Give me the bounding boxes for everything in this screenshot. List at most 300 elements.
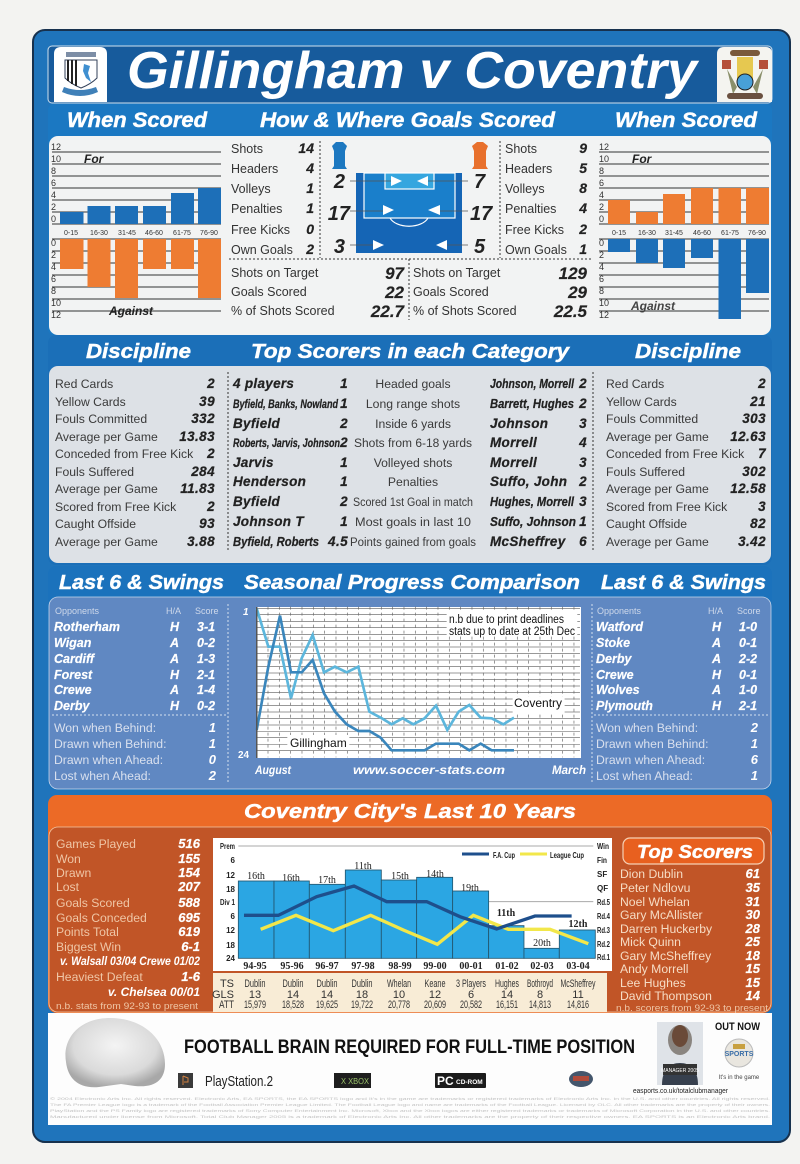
table: top scorers by season: 18,528 [282, 999, 304, 1011]
text block: Coventry top scorers: 2 [578, 376, 587, 391]
text block: Coventry swings [596, 720, 759, 783]
text block: Coventry discipline: Fouls Suffered [606, 465, 685, 479]
text block: Coventry top scorers: 2 [578, 396, 587, 411]
text block: Coventry top scorers: 3 [579, 494, 587, 509]
table: Coventry last 6: H/A [708, 606, 723, 616]
bar chart: Gillingham when scored: 6 [51, 178, 56, 188]
text block: Gillingham discipline [55, 376, 215, 549]
text block: Coventry swings: Won when Behind: [596, 721, 698, 735]
text block: Gillingham swings [54, 720, 217, 783]
bar chart: Gillingham when scored: 2 [51, 202, 56, 212]
text block: Gillingham discipline: Fouls Suffered [55, 465, 134, 479]
axis labels left: 6 [231, 856, 236, 865]
text block: Gillingham top scorers [232, 376, 348, 549]
bar chart: Coventry when scored [599, 142, 769, 320]
text block: Gillingham shot types: Penalties [231, 202, 282, 216]
text block: Coventry totals: 22.5 [553, 302, 588, 321]
text block: all-time scorers: 61 [746, 866, 760, 881]
table: Coventry last 6: 0-1 [739, 636, 757, 650]
text block: Coventry overall record: Goals Conceded [56, 911, 147, 925]
axis labels right: Win [597, 842, 609, 851]
panel: lower orange background [49, 827, 771, 1012]
text block: Coventry overall record: 619 [178, 924, 201, 939]
headline: FOOTBALL BRAIN REQUIRED FOR FULL-TIME POSITION [184, 1037, 635, 1058]
table: Coventry last 6: A [711, 652, 721, 666]
axis labels left: 12 [226, 926, 236, 935]
table: top scorers by season: McSheffrey [560, 978, 596, 990]
text block: Coventry discipline: Yellow Cards [606, 395, 677, 409]
table: Coventry last 6: Plymouth [596, 699, 653, 713]
text block: Coventry discipline: 3.42 [738, 534, 766, 549]
heading: seasonal progress comparison: Seasonal Progress Comparison [244, 572, 580, 594]
table: top scorers by season: 18 [356, 989, 368, 1001]
text block: Gillingham top scorers: Roberts, Jarvis, Johnson [233, 436, 340, 450]
text block: Gillingham shot types: 4 [305, 160, 314, 176]
text block: Coventry discipline: 7 [758, 446, 767, 461]
heading: how and where goals scored: How & Where Goals Scored [260, 109, 556, 132]
table: top scorers by season: ATT [219, 999, 234, 1011]
table: Coventry last 6: 0-1 [739, 668, 757, 682]
text block: Gillingham swings: Drawn when Ahead: [54, 753, 163, 767]
text block: Coventry shot types: Free Kicks [505, 223, 564, 237]
text block: Coventry totals: 129 [559, 264, 588, 283]
bar chart: Coventry when scored: 8 [599, 286, 604, 296]
text block: Gillingham top scorers: Jarvis [233, 455, 274, 470]
season labels: 94-95 [243, 961, 267, 972]
table: Gillingham last 6: A [169, 652, 179, 666]
heading: when scored right: When Scored [615, 109, 758, 132]
season labels [243, 961, 590, 972]
axis labels left: 24 [226, 954, 236, 963]
line chart: seasonal progress [238, 607, 586, 777]
small print: © 2004 Electronic Arts Inc. All rights reserved. Electronic Arts, EA SPORTS, the EA SPORTS logo and It's in the game are trademarks or registered trademarks of Electronic Arts Inc. in the U.S. and other countries. All rights reserved. [50, 1096, 770, 1101]
text block: all-time scorers: 15 [746, 961, 761, 976]
text block: Coventry discipline: Average per Game [606, 535, 709, 549]
text block: Gillingham shot types: 2 [305, 241, 314, 257]
text block: Coventry overall record: 588 [178, 895, 201, 910]
text block: all-time scorers: 25 [745, 934, 761, 949]
table: Coventry last 6: H [712, 699, 722, 713]
logo: Xbox: X XBOX [341, 1077, 370, 1086]
text block: all-time scorers: Gary McSheffrey [620, 949, 712, 963]
panel: statistics [49, 136, 771, 335]
text block: Gillingham discipline: Red Cards [55, 377, 113, 391]
text block: Coventry shot types: 4 [578, 200, 587, 216]
text block: Gillingham top scorers: 1 [340, 376, 348, 391]
callout: top scorers heading [623, 838, 764, 864]
axis labels left: 18 [226, 885, 236, 894]
table: top scorers by season: 20,582 [460, 999, 482, 1011]
bar chart: Coventry when scored: 4 [599, 190, 604, 200]
text block: categories [350, 377, 476, 549]
text block: Coventry overall record: Won [56, 852, 81, 866]
text block: Gillingham swings: Lost when Ahead: [54, 769, 151, 783]
table: Coventry last 6: Derby [596, 652, 632, 666]
bar chart: Gillingham when scored: 12 [51, 310, 61, 320]
text block: Gillingham top scorers: 1 [340, 514, 348, 529]
table: Coventry last 6: Crewe [596, 668, 634, 682]
table: top scorers by season: 6 [468, 989, 474, 1001]
finishing positions: 20th [533, 938, 551, 949]
table: Coventry last 6: 2-2 [738, 652, 757, 666]
goal zone numbers: Coventry: 17 [470, 203, 493, 225]
finishing positions: 11th [354, 861, 372, 872]
legend [462, 850, 584, 860]
text block: Gillingham discipline: Scored from Free Kick [55, 500, 177, 514]
text block: Coventry discipline: Scored from Free Kick [606, 500, 728, 514]
text block: Gillingham shot types: Shots [231, 142, 263, 156]
bar chart: Coventry when scored: 0 [599, 238, 604, 248]
finishing positions: 11th [497, 908, 516, 919]
table: Coventry last 6: Stoke [596, 636, 630, 650]
axis labels right: Rd.1 [597, 953, 610, 962]
table: Coventry last 6: 2-1 [738, 699, 757, 713]
table: Gillingham last 6: 0-2 [197, 636, 215, 650]
axis labels: March [552, 765, 586, 777]
text block: Gillingham swings: Drawn when Behind: [54, 737, 166, 751]
text: it's in the game: It's in the game [719, 1075, 760, 1081]
bar chart: Coventry when scored: 16-30 [638, 230, 656, 237]
table: top scorers by season: 3 Players [456, 978, 486, 990]
table: Gillingham last 6: Forest [54, 668, 93, 682]
text block: categories: Long range shots [366, 397, 460, 411]
text block: Coventry shot types: Headers [505, 162, 552, 176]
text block: Gillingham top scorers: 1 [340, 474, 348, 489]
table: top scorers by season: Hughes [495, 978, 519, 990]
table: Coventry last 6: 1-0 [739, 683, 757, 697]
table: Gillingham last 6: Cardiff [54, 652, 96, 666]
text block: Gillingham top scorers: 2 [339, 435, 348, 450]
season labels: 98-99 [388, 961, 412, 972]
axis labels right: Rd.5 [597, 898, 610, 907]
text block: Coventry top scorers: 3 [579, 416, 587, 431]
season labels: 96-97 [315, 961, 339, 972]
text block: Coventry shot types: Penalties [505, 202, 556, 216]
table: top scorers by season: GLS [212, 989, 234, 1001]
table: Gillingham last 6: H [170, 620, 180, 634]
text block: Coventry overall record: 154 [178, 865, 201, 880]
section: when scored and how goals scored [48, 104, 772, 335]
text block: Coventry discipline: 302 [742, 464, 766, 479]
text block: Coventry overall record: 1-6 [181, 969, 201, 984]
text block: Coventry shot types: 2 [578, 221, 587, 237]
section: discipline and top scorers [48, 335, 772, 565]
text block: Coventry top scorers [490, 376, 587, 549]
bar chart: Gillingham when scored: 4 [51, 190, 56, 200]
season labels: 97-98 [351, 961, 375, 972]
text block: Gillingham discipline: Conceded from Free Kick [55, 447, 194, 461]
season labels: 01-02 [495, 961, 519, 972]
axis labels: August [254, 765, 292, 777]
text block: Coventry discipline: Caught Offside [606, 517, 687, 531]
axis labels: 24 [238, 750, 250, 761]
text block: Gillingham totals: 22 [384, 283, 405, 302]
table: Gillingham last 6: Derby [54, 699, 90, 713]
text block: Coventry overall record: 207 [177, 879, 201, 894]
table: top scorers by season: Keane [424, 978, 446, 990]
small print: Manufactured under license from Microsoft. Total Club Manager 2005 is a trademark of Electronic Arts Inc. All other trademarks are the property of their respective owners. EA SPORTS is an Electronic Arts brand. [50, 1114, 770, 1119]
axis labels left: 18 [226, 941, 236, 950]
text block: all-time scorers: 30 [746, 907, 761, 922]
table: top scorers by season: 11 [572, 989, 584, 1001]
text block: Coventry discipline: Red Cards [606, 377, 664, 391]
text block: Gillingham totals: Goals Scored [231, 285, 307, 299]
small print [50, 1096, 770, 1119]
text block: Gillingham discipline: Average per Game [55, 535, 158, 549]
text block: all-time scorers: Dion Dublin [620, 867, 683, 881]
text block: Gillingham shot types [231, 140, 314, 257]
table: Gillingham last 6: H/A [166, 606, 181, 616]
text block: Gillingham swings: 2 [208, 768, 217, 783]
text block: Gillingham totals: Shots on Target [231, 266, 319, 280]
logo: PC CD-ROM: CD-ROM [456, 1079, 483, 1086]
text block: Gillingham swings: 1 [209, 736, 216, 751]
text block: Coventry discipline: 303 [742, 411, 766, 426]
text block: Coventry top scorers: Johnson, Morrell [490, 377, 574, 391]
text block: Coventry shot types [505, 140, 587, 257]
text block: Coventry overall record: Drawn [56, 866, 91, 880]
bar chart: Coventry when scored: 4 [599, 262, 604, 272]
text block: Gillingham shot types: 14 [298, 140, 314, 156]
table: Gillingham last 6: Opponents [55, 606, 100, 616]
text block: Gillingham shot types: Volleys [231, 182, 271, 196]
label: Gillingham: Gillingham [290, 736, 347, 750]
table: Coventry last 6: Opponents [597, 606, 642, 616]
note: print deadlines [449, 614, 575, 638]
table: top scorers by season: 20,778 [388, 999, 410, 1011]
text block: Coventry discipline: 12.58 [730, 481, 766, 496]
bar chart: Coventry when scored: 31-45 [665, 230, 683, 237]
bar chart: Coventry when scored: 61-75 [721, 230, 739, 237]
text block: Coventry overall record: 6-1 [181, 939, 200, 954]
bar chart: Gillingham when scored: 76-90 [200, 230, 218, 237]
text block: Gillingham totals: 97 [385, 264, 406, 283]
table: top scorers by season: Dublin [244, 978, 266, 990]
text block: Coventry top scorers: McSheffrey [490, 534, 567, 549]
table: top scorers by season: 14,816 [567, 999, 589, 1011]
table: top scorers by season: 10 [393, 989, 405, 1001]
text block: Coventry overall record: 516 [178, 836, 201, 851]
bar chart: Gillingham when scored: For [84, 152, 105, 166]
text block: Coventry top scorers: Suffo, John [490, 474, 567, 489]
small print: PlayStation and the PS Family logo are registered trademarks of Sony Computer Entertainment Inc. Microsoft, Xbox and the Xbox logos are either registered trademarks or trademarks of Microsoft Corporation in the U.S. and other countries. [50, 1108, 770, 1113]
goal zone numbers: Gillingham: 3 [334, 236, 345, 258]
table: Gillingham last 6: 1-4 [197, 683, 215, 697]
text block: Gillingham discipline: 13.83 [179, 429, 215, 444]
text block: all-time scorers: David Thompson [620, 989, 712, 1003]
table: top scorers by season: Dublin [352, 978, 372, 990]
text block: Coventry overall record: Goals Scored [56, 896, 130, 910]
text block: Coventry top scorers: 3 [579, 455, 587, 470]
text block: Coventry swings: 1 [751, 768, 758, 783]
text block: Gillingham totals: 22.7 [370, 302, 406, 321]
text block: Gillingham discipline: Yellow Cards [55, 395, 126, 409]
text block: all-time scorers: Peter Ndlovu [620, 881, 690, 895]
legend: F.A. Cup [493, 850, 515, 860]
text block: Coventry totals [413, 264, 588, 321]
text block: Coventry overall record: Lost [56, 880, 80, 894]
text block: Gillingham discipline: 39 [199, 394, 215, 409]
text block: Gillingham shot types: 1 [306, 200, 314, 216]
text block: Gillingham top scorers: Johnson T [233, 514, 305, 529]
heading: last 6 and swings right: Last 6 & Swings [601, 572, 766, 594]
icon: Coventry crest [717, 47, 772, 102]
text block: Coventry top scorers: Suffo, Johnson [490, 515, 576, 529]
table: top scorers by season: 14,813 [529, 999, 551, 1011]
text block: Gillingham swings: Won when Behind: [54, 721, 156, 735]
bar chart: Gillingham when scored: 12 [51, 142, 61, 152]
bar chart: Coventry when scored: 12 [599, 142, 609, 152]
text block: Gillingham top scorers: 4.5 [327, 534, 348, 549]
text block: Coventry discipline [606, 376, 767, 549]
text block: categories: Headed goals [375, 377, 451, 391]
text block: all-time scorers: 14 [746, 988, 761, 1003]
axis labels left: 12 [226, 871, 236, 880]
text block: Gillingham top scorers: Byfield, Roberts [233, 535, 319, 549]
table: top scorers by season: 14 [501, 989, 513, 1001]
axis labels right: Rd.4 [597, 912, 610, 921]
text block: Coventry top scorers: Morrell [490, 455, 537, 470]
table: Coventry last 6: A [711, 636, 721, 650]
finishing positions: 16th [247, 871, 265, 882]
logo: Xbox [334, 1073, 371, 1088]
bar chart: Coventry when scored: 2 [599, 202, 604, 212]
text block: Coventry discipline: 3 [758, 499, 766, 514]
table: Gillingham last 6: Rotherham [54, 620, 120, 634]
logo: PlayStation 2: PlayStation.2 [205, 1073, 273, 1090]
text: website: easports.co.uk/totalclubmanager [633, 1088, 729, 1095]
text block: Coventry swings: 1 [751, 736, 758, 751]
text block: categories: Penalties [388, 475, 438, 489]
axis labels right [597, 842, 610, 962]
text block: all-time scorers: 31 [746, 894, 760, 909]
bar chart: Coventry when scored: 12 [599, 310, 609, 320]
text block: Gillingham top scorers: 2 [339, 494, 348, 509]
chart: league position and cup runs [213, 838, 612, 972]
bar chart: Coventry when scored: 76-90 [748, 230, 766, 237]
text block: all-time scorers: 28 [745, 921, 761, 936]
bar chart: Coventry when scored: 46-60 [693, 230, 711, 237]
text block: categories: Volleyed shots [374, 456, 452, 470]
table: Coventry last 6: Wolves [596, 683, 640, 697]
heading: Coventry City's last 10 years: Coventry City's Last 10 Years [244, 801, 576, 823]
note: print deadlines: n.b due to print deadlines [449, 614, 564, 626]
table: Coventry last 6: H [712, 668, 722, 682]
text block: Gillingham discipline: Caught Offside [55, 517, 136, 531]
text block: Coventry shot types: 5 [579, 160, 587, 176]
axis labels left: Div 1 [220, 898, 235, 907]
table: Coventry last 6: A [711, 683, 721, 697]
table: Gillingham last 6: Score [195, 606, 219, 616]
table: top scorers by season: Dublin [316, 978, 338, 990]
season labels: 00-01 [459, 961, 483, 972]
finishing positions: 16th [282, 873, 300, 884]
text block: all-time scorers: n.b. scorers from 92-93 to present [616, 1003, 768, 1014]
table: Coventry last 6: Watford [596, 620, 643, 634]
table: Gillingham last 6: A [169, 683, 179, 697]
table: top scorers by season: 14 [321, 989, 333, 1001]
text block: Coventry totals: 29 [567, 283, 588, 302]
text block: Coventry discipline: Average per Game [606, 430, 709, 444]
table: Gillingham last 6: A [169, 636, 179, 650]
finishing positions: 12th [569, 919, 588, 930]
goal zone numbers: Gillingham [328, 171, 351, 258]
text block: Gillingham discipline: 332 [191, 411, 215, 426]
text block: Coventry top scorers: Hughes, Morrell [490, 495, 574, 509]
text block: all-time scorers [616, 866, 768, 1014]
text block: Coventry overall record: n.b. stats from 92-93 to present [56, 1001, 198, 1012]
axis labels right: SF [597, 870, 607, 879]
table: top scorers by season: 14 [287, 989, 299, 1001]
table: top scorers by season: 15,979 [244, 999, 266, 1011]
table: top scorers by season: 8 [537, 989, 543, 1001]
text block: Coventry overall record: Biggest Win [56, 940, 121, 954]
bar chart: Coventry when scored: Against [630, 299, 676, 313]
text block: Gillingham discipline: Average per Game [55, 482, 158, 496]
table: Gillingham last 6: 2-1 [196, 668, 215, 682]
heading: last 6 and swings left: Last 6 & Swings [59, 572, 224, 594]
text block: Coventry totals: % of Shots Scored [413, 304, 517, 318]
bar chart: Coventry when scored: 8 [599, 166, 604, 176]
text block: categories: Inside 6 yards [375, 417, 451, 431]
text block: categories: Scored 1st Goal in match [353, 495, 473, 509]
bar chart: Gillingham when scored: 10 [51, 298, 61, 308]
heading: when scored left: When Scored [67, 109, 208, 132]
logo: PC CD-ROM [435, 1073, 486, 1088]
text block: Coventry overall record: 695 [178, 910, 201, 925]
text block: Coventry overall record: v. Walsall 03/04 Crewe 01/02 [60, 956, 201, 968]
table: Gillingham last 6: H [170, 668, 180, 682]
finishing positions: 14th [426, 869, 444, 880]
finishing positions: 19th [461, 883, 479, 894]
goal zone numbers: Coventry: 5 [474, 236, 486, 258]
text block: Coventry shot types: 9 [579, 140, 587, 156]
text block: all-time scorers: 18 [746, 948, 761, 963]
text block: Gillingham totals [231, 264, 406, 321]
text block: Coventry discipline: 21 [749, 394, 766, 409]
text block: Coventry top scorers: Johnson [490, 416, 548, 431]
text block: Gillingham discipline: 2 [206, 499, 215, 514]
goal zone numbers: Gillingham: 2 [333, 171, 345, 193]
bar chart: Gillingham when scored: 46-60 [145, 230, 163, 237]
panel: discipline and scorers [49, 366, 771, 563]
bar chart: Coventry when scored: 2 [599, 250, 604, 260]
text block: categories: Most goals in last 10 [355, 515, 471, 529]
table: top scorers by season: 19,625 [316, 999, 338, 1011]
bar chart: Gillingham when scored: 31-45 [118, 230, 136, 237]
text block: Coventry totals: Shots on Target [413, 266, 501, 280]
text block: Coventry overall record: Heaviest Defeat [56, 970, 143, 984]
label: Coventry: Coventry [514, 696, 562, 710]
text block: all-time scorers: 15 [746, 975, 761, 990]
text block: all-time scorers: Gary McAllister [620, 908, 703, 922]
text block: Coventry overall record [56, 836, 201, 1012]
table: top scorers by season [212, 973, 607, 1012]
bar chart: Coventry when scored: 6 [599, 274, 604, 284]
table: top scorers by season: Bothroyd [527, 978, 553, 990]
title banner [48, 42, 772, 103]
text block: Gillingham discipline: 2 [206, 376, 215, 391]
text block: Gillingham top scorers: Henderson [233, 474, 306, 489]
axis labels left [220, 842, 236, 963]
panel: last 6 background [49, 597, 771, 789]
table: top scorers by season: 13 [249, 989, 261, 1001]
text block: Coventry discipline: Fouls Committed [606, 412, 698, 426]
table: Gillingham last 6: 3-1 [197, 620, 215, 634]
axis labels right: QF [597, 884, 608, 893]
text block: Coventry top scorers: 1 [579, 514, 587, 529]
text block: Gillingham discipline: 11.83 [180, 481, 215, 496]
